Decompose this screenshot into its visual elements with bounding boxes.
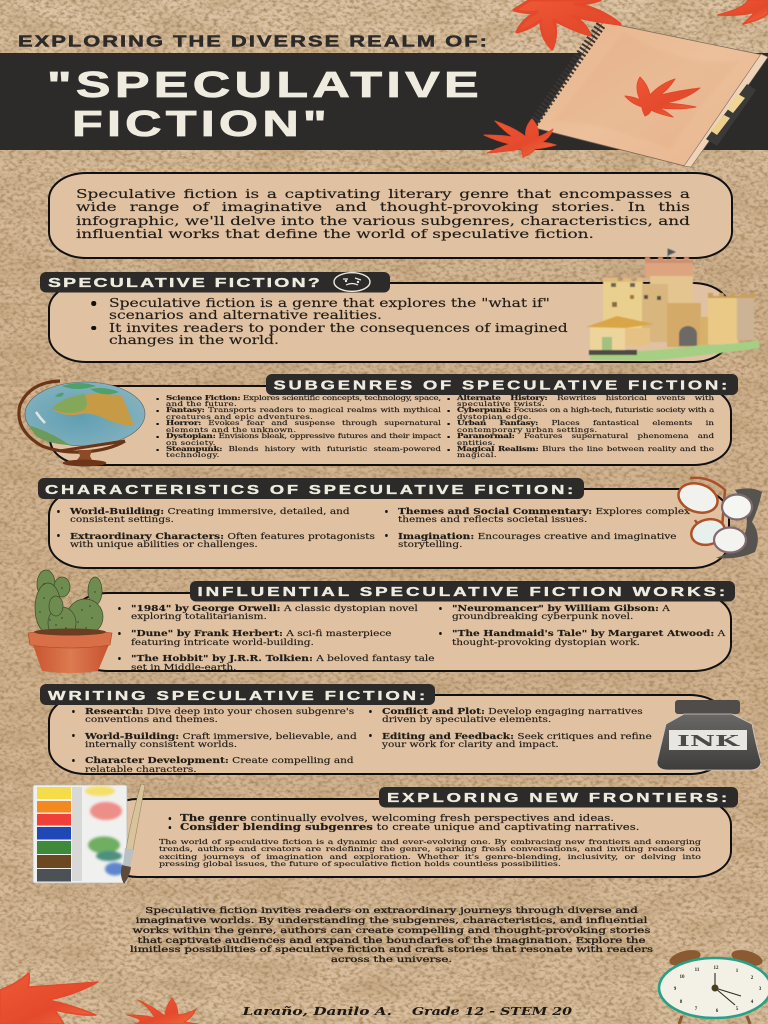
subgenre list: right column: Magical Realism: Blurs the line between reality and the — [457, 446, 714, 453]
subgenre list: right column: entities. — [457, 440, 496, 447]
section: characteristics — [38, 478, 730, 569]
intro text: Speculative fiction is a captivating literary genre that encompasses a — [76, 186, 690, 201]
heading pill: speculative fiction? — [40, 272, 390, 292]
subgenre list: left column: technology. — [166, 452, 220, 459]
author credit: Grade 12 - STEM 20 — [412, 1005, 572, 1018]
writing list: left column: Research: Dive deep into your chosen subgenre's — [85, 706, 354, 716]
icon: alarm clock — [659, 947, 768, 1024]
writing list: left column: Character Development: Create compelling and — [85, 755, 354, 765]
icon: leaf on notebook — [625, 77, 700, 117]
subgenre list: right column: Paranormal: Features supernatural phenomena and — [457, 433, 714, 440]
icon: watercolor palette — [33, 784, 145, 884]
icon: alarm clock: 9 — [674, 987, 677, 992]
author credit: Laraño, Danilo A. — [241, 1005, 392, 1018]
frontiers paragraph: trends, authors and creators are redefining the genre, sparking fresh conversations, and inviting readers on — [159, 845, 701, 853]
panel: introduction — [48, 172, 732, 259]
works list: left column: featuring intricate world-building. — [131, 637, 314, 647]
works list: left column: "Dune" by Frank Herbert: A sci-fi masterpiece — [131, 628, 391, 638]
subgenre list: right column: Urban Fantasy: Places fantastical elements in — [457, 420, 714, 427]
closing paragraph: imaginative worlds. By understanding the subgenres, characteristics, and influential — [136, 916, 647, 926]
title: speculative fiction: FICTION" — [72, 103, 331, 144]
characteristics list: right column: themes and reflects societal issues. — [398, 514, 587, 524]
writing list: left column: conventions and themes. — [85, 714, 218, 724]
icon: alarm clock: 6 — [716, 1009, 719, 1014]
bullet list: definition: It invites readers to ponder the consequences of imagined — [109, 321, 568, 335]
subgenre list: left column: Fantasy: Transports readers to magical realms with mythical — [166, 407, 441, 414]
section: subgenres — [49, 374, 738, 466]
characteristics list: right column: Imagination: Encourages creative and imaginative — [398, 531, 677, 541]
icon: alarm clock: 5 — [736, 1007, 739, 1012]
heading pill: influential works — [190, 581, 735, 602]
frontiers bullets — [168, 812, 639, 833]
heading pill: characteristics: CHARACTERISTICS OF SPECULATIVE FICTION: — [45, 482, 576, 497]
heading: exploring the diverse realm of: EXPLORING THE DIVERSE REALM OF: — [18, 34, 489, 50]
heading pill: influential works: INFLUENTIAL SPECULATIVE FICTION WORKS: — [198, 584, 728, 599]
subgenre list: left column: Steampunk: Blends history with futuristic steam-powered — [166, 446, 441, 453]
bullet list: definition: changes in the world. — [109, 333, 279, 347]
intro text: infographic, we'll delve into the various subgenres, characteristics, and — [76, 213, 690, 228]
icon: castle — [586, 249, 760, 361]
section: influential works — [82, 581, 735, 672]
heading pill: subgenres — [266, 374, 738, 395]
writing list: right column: Conflict and Plot: Develop engaging narratives — [382, 706, 643, 716]
characteristics list: right column: Themes and Social Commentary: Explores complex — [398, 506, 690, 516]
works list: right column: thought-provoking dystopian work. — [452, 637, 640, 647]
subgenre list: left column: Horror: Evokes fear and suspense through supernatural — [166, 420, 441, 427]
heading pill: writing — [40, 684, 435, 705]
icon: leaf by notebook — [484, 119, 556, 157]
subgenre list: right column — [447, 394, 714, 459]
characteristics list: left column: Extraordinary Characters: Often features protagonists — [70, 531, 375, 541]
works list: left column: exploring totalitarianism. — [131, 611, 267, 621]
works list: right column: "Neuromancer" by William Gibson: A — [452, 603, 670, 613]
subgenre list: left column: Dystopian: Envisions bleak, oppressive futures and their impact — [166, 433, 441, 440]
intro text — [76, 186, 690, 241]
subgenre list: right column: contemporary urban settings. — [457, 427, 598, 434]
intro text: influential works that define the world of speculative fiction. — [76, 226, 594, 241]
works list: left column: "The Hobbit" by J.R.R. Tolkien: A beloved fantasy tale — [131, 653, 434, 663]
title: speculative fiction — [47, 64, 483, 144]
frontiers bullets: The genre continually evolves, welcoming fresh perspectives and ideas. — [180, 812, 614, 824]
icon: bottom center leaf — [127, 998, 198, 1024]
closing paragraph: limitless possibilities of speculative fiction and craft stories that resonate with readers — [130, 945, 653, 955]
icon: alarm clock: 11 — [695, 968, 700, 973]
frontiers paragraph: exciting journeys of imagination and exploration. Whether it's genre-blending, inclusivity, or delving into — [159, 853, 701, 861]
section: what is speculative fiction — [40, 272, 727, 363]
icon: ink bottle: INK — [677, 732, 741, 750]
icon: alarm clock: 4 — [751, 1000, 754, 1005]
subgenre list: right column: dystopian edge. — [457, 414, 532, 421]
bullet list: definition: scenarios and alternative realities. — [109, 308, 382, 322]
writing list: left column: World-Building: Craft immersive, believable, and — [85, 731, 357, 741]
works list: left column: "1984" by George Orwell: A classic dystopian novel — [131, 603, 418, 613]
icon: ink bottle — [657, 700, 761, 770]
icon: alarm clock: 10 — [680, 975, 685, 980]
closing paragraph — [130, 906, 653, 965]
writing list: left column — [72, 706, 357, 774]
icon: alarm clock: 3 — [759, 987, 762, 992]
works list: right column: groundbreaking cyberpunk novel. — [452, 611, 633, 621]
icon: notebook — [533, 22, 768, 167]
icon: alarm clock: 1 — [736, 969, 739, 974]
icon: alarm clock: 8 — [680, 1000, 683, 1005]
icon: alarm clock: 2 — [751, 976, 754, 981]
author credit — [241, 1005, 572, 1018]
characteristics list: right column — [385, 506, 690, 550]
writing list: right column: Editing and Feedback: Seek critiques and refine — [382, 731, 652, 741]
subgenre list: right column: Cyberpunk: Focuses on a high-tech, futuristic society with a — [457, 407, 714, 414]
icon: bottom left leaf — [0, 973, 98, 1024]
frontiers paragraph — [159, 838, 701, 868]
icon: top right leaf — [718, 0, 768, 24]
characteristics list: left column: consistent settings. — [70, 514, 174, 524]
icon: globe — [19, 381, 145, 466]
dark title band — [0, 53, 768, 150]
section: exploring new frontiers — [127, 787, 738, 878]
heading pill: writing: WRITING SPECULATIVE FICTION: — [48, 688, 428, 703]
works list: right column — [439, 603, 726, 648]
characteristics list: right column: storytelling. — [398, 539, 462, 549]
frontiers bullets: Consider blending subgenres to create unique and captivating narratives. — [180, 822, 639, 833]
writing list: right column — [369, 706, 652, 750]
subgenre list: left column — [156, 394, 442, 459]
subgenre list: left column: creatures and epic adventures. — [166, 414, 313, 421]
closing paragraph: that captivate audiences and expand the boundaries of the imagination. Explore the — [137, 936, 646, 946]
subgenre list: left column: Science Fiction: Explores scientific concepts, technology, space, — [166, 394, 441, 402]
characteristics list: left column — [57, 506, 375, 550]
characteristics list: left column: World-Building: Creating immersive, detailed, and — [70, 506, 350, 516]
closing paragraph: Speculative fiction invites readers on extraordinary journeys through diverse and — [145, 906, 638, 916]
icon: alarm clock: 12 — [714, 966, 719, 971]
works list: left column: set in Middle-earth. — [131, 662, 236, 672]
title: speculative fiction: "SPECULATIVE — [47, 64, 483, 105]
bullet list: definition: Speculative fiction is a genre that explores the "what if" — [109, 296, 550, 310]
subgenre list: right column: speculative twists. — [457, 401, 545, 408]
heading pill: speculative fiction?: SPECULATIVE FICTION? — [48, 275, 322, 290]
heading pill: subgenres: SUBGENRES OF SPECULATIVE FICTION: — [274, 378, 730, 393]
writing list: right column: your work for clarity and impact. — [382, 739, 559, 749]
subgenre list: left column: elements and the unknown. — [166, 427, 296, 434]
intro text: wide range of imaginative and thought-provoking stories. In this — [76, 199, 690, 214]
icon: top leaf — [514, 0, 620, 49]
characteristics list: left column: with unique abilities or challenges. — [70, 539, 258, 549]
frontiers paragraph: The world of speculative fiction is a dynamic and ever-evolving one. By embracing new frontiers and emerging — [159, 838, 701, 846]
heading pill: new frontiers: EXPLORING NEW FRONTIERS: — [387, 790, 730, 805]
icon: glasses — [675, 478, 762, 558]
bullet list: definition — [91, 296, 568, 347]
icon: alarm clock: 7 — [695, 1007, 698, 1012]
subgenre list: left column: and the future. — [166, 401, 237, 408]
closing paragraph: works within the genre, authors can create compelling and thought-provoking stories — [133, 926, 650, 936]
closing paragraph: across the universe. — [331, 955, 452, 965]
frontiers paragraph: pressing global issues, the future of speculative fiction holds countless possibilities. — [159, 860, 561, 868]
heading pill: characteristics — [38, 478, 584, 499]
writing list: left column: internally consistent worlds. — [85, 739, 237, 749]
works list: right column: "The Handmaid's Tale" by Margaret Atwood: A — [452, 628, 725, 638]
icon: cactus in pot — [28, 570, 112, 673]
subgenre list: right column: Alternate History: Rewrites historical events with — [457, 394, 714, 402]
section: writing speculative fiction — [40, 684, 714, 775]
writing list: right column: driven by speculative elements. — [382, 714, 551, 724]
subgenre list: left column: on society. — [166, 440, 216, 447]
writing list: left column: relatable characters. — [85, 764, 197, 774]
subgenre list: right column: magical. — [457, 452, 497, 459]
heading pill: new frontiers — [379, 787, 738, 808]
works list: left column — [118, 603, 434, 672]
